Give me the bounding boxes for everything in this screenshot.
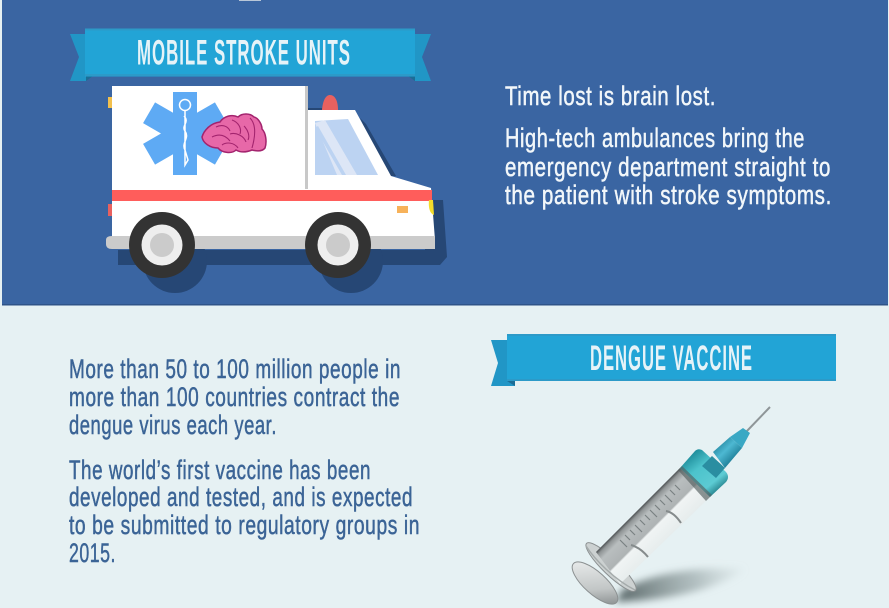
rear flange lip — [586, 546, 635, 590]
rear markers — [108, 97, 112, 108]
text block: dengue statistics: More than 50 to 100 million people in — [69, 354, 401, 384]
red stripe — [112, 190, 432, 201]
text block: dengue statistics — [69, 354, 420, 568]
icon: brain — [202, 114, 266, 152]
syringe shadow — [615, 568, 745, 602]
plunger seals — [631, 511, 681, 557]
teal barrel cap — [680, 449, 728, 497]
text block: dengue statistics: to be submitted to regulatory groups in — [69, 510, 420, 540]
needle hub — [713, 437, 742, 468]
text block: dengue statistics: more than 100 countries contract the — [69, 382, 400, 412]
banner: mobile stroke units: MOBILE STROKE UNITS — [137, 34, 351, 72]
banner: dengue vaccine — [491, 334, 836, 386]
scale ticks — [620, 485, 680, 547]
ambulance shadow — [118, 108, 447, 293]
panel: mobile stroke units — [2, 0, 888, 306]
bumper — [106, 236, 435, 249]
front wheel — [305, 212, 371, 278]
ambulance body — [112, 86, 435, 240]
panel: dengue vaccine — [69, 334, 836, 608]
text block: dengue statistics: developed and tested, and is expected — [69, 482, 413, 512]
dark cap band — [678, 466, 712, 501]
needle — [746, 407, 770, 432]
front flange — [566, 555, 624, 608]
text block: time lost — [505, 81, 832, 210]
hub collar — [702, 456, 725, 478]
icon: syringe — [566, 407, 770, 608]
rear wheel — [129, 212, 195, 278]
text block: dengue statistics: The world’s first vaccine has been — [69, 455, 371, 485]
banner: mobile stroke units — [70, 28, 431, 81]
needle tip hub — [730, 428, 750, 448]
orange side light — [397, 206, 408, 213]
text block: dengue statistics: 2015. — [69, 538, 116, 568]
icon: star of life — [143, 92, 227, 175]
headlight — [429, 200, 434, 215]
text block: dengue statistics: dengue virus each year. — [69, 410, 277, 440]
text block: time lost: Time lost is brain lost. — [505, 81, 716, 111]
icon: ambulance — [106, 86, 447, 293]
cabin divider — [305, 86, 308, 189]
barrel — [596, 468, 710, 584]
windshield — [315, 119, 378, 175]
rear flange — [581, 538, 641, 596]
beacon light — [322, 95, 338, 110]
panel: page background — [0, 305, 889, 608]
